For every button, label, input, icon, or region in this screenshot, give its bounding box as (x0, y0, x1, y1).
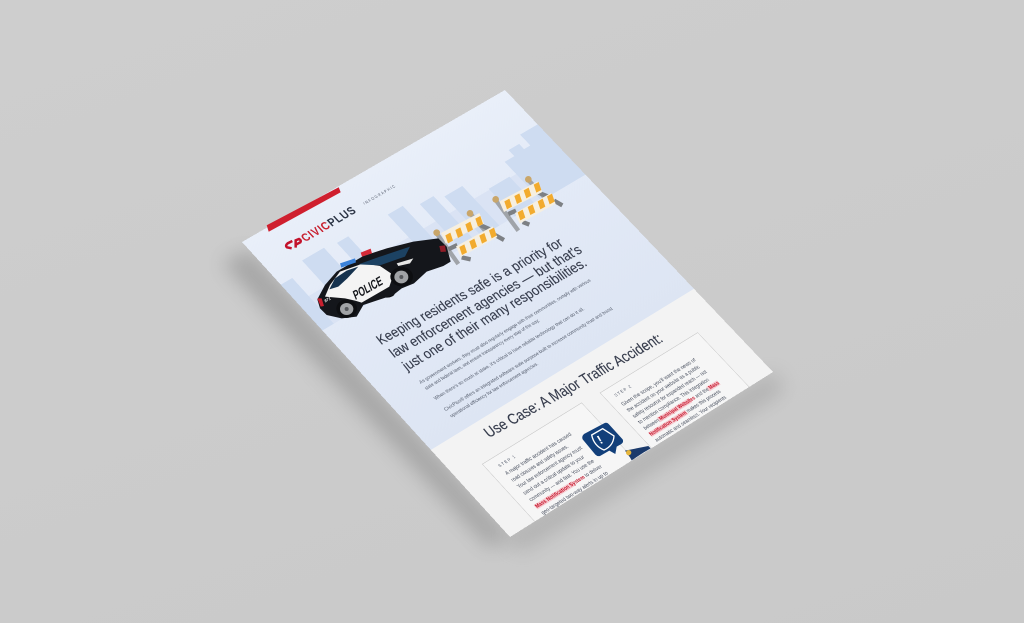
heading: keeping residents safe (373, 234, 590, 374)
step 1 text: community — and fast. You use the (515, 450, 586, 491)
step 2 text: Given the scope, you'll want the news of (614, 357, 697, 404)
step 2 text: between Municipal Websites and the Mass (635, 379, 719, 426)
light bar (340, 249, 372, 268)
intro body text (418, 277, 623, 419)
intro body text: operational efficiency for law enforcement agencies. (441, 359, 536, 412)
car number: 871 (324, 295, 332, 304)
logo mark (286, 239, 301, 248)
logo wordmark: CIVICPLUS (300, 207, 362, 245)
step 2 text (620, 357, 733, 444)
police car (317, 238, 451, 318)
blue header background (242, 90, 694, 450)
step 1 text: Mass Notification System to deliver (521, 455, 593, 497)
step 2 text: Notification System makes this process (640, 387, 720, 432)
intro body text: As government workers, they must also regularly engage with their communities, comply with various (413, 279, 596, 380)
use case heading: Use Case: A Major Traffic Accident: (480, 330, 666, 441)
step 1 text: send out a critical update to your (510, 446, 576, 485)
barrier 1 (433, 210, 504, 264)
step 2 label: STEP 2 (608, 381, 629, 394)
step 1 text: road closures and safety issues. (499, 437, 561, 473)
step 1 card (482, 403, 655, 544)
step 2 card (600, 333, 771, 471)
step 1 label: STEP 1 (486, 445, 508, 458)
intro body text: When there's so much at stake, it's critical to have reliable technology that can do it all. (426, 307, 586, 395)
city skyline (274, 124, 585, 330)
alert shield icon: ! (594, 433, 606, 447)
step 1 text: geo-targeted two-way alerts in up to (526, 462, 599, 503)
intro body text: state and federal laws, and ensure transparency every step of the way. (418, 318, 540, 386)
heading: keeping residents safe: just one of their many responsibilities. (398, 254, 590, 374)
barrier 2 (492, 176, 562, 231)
step 2 text: to mention compliance. This integration (630, 376, 709, 421)
step 2 text: automatic and seamless. Your recipients (645, 393, 725, 438)
step 2 text: the accident on your website as a public (620, 363, 700, 409)
grey lower section background (431, 289, 773, 537)
intro body text: CivicPlus® offers an integrated software suite purpose-built to increase community trust and boost (435, 306, 616, 406)
red accent bar (267, 187, 341, 232)
infographic label: INFOGRAPHIC (365, 186, 401, 207)
step 1 text: Your law enforcement agency must (504, 438, 575, 479)
step 1 text (503, 431, 610, 517)
police door lettering: POLICE (351, 274, 385, 303)
heading: keeping residents safe: Keeping residents safe is a priority for (373, 234, 567, 348)
heading: keeping residents safe: law enforcement agencies — but that's (386, 241, 586, 361)
document page (242, 90, 773, 537)
police hat icon (625, 446, 651, 460)
far skyline (297, 148, 585, 330)
step 2 text: safety resource for expanded reach — not (625, 368, 707, 415)
front wheel (336, 299, 357, 318)
rear wheel (390, 267, 413, 286)
step 1 text: A major traffic accident has caused (493, 425, 565, 466)
